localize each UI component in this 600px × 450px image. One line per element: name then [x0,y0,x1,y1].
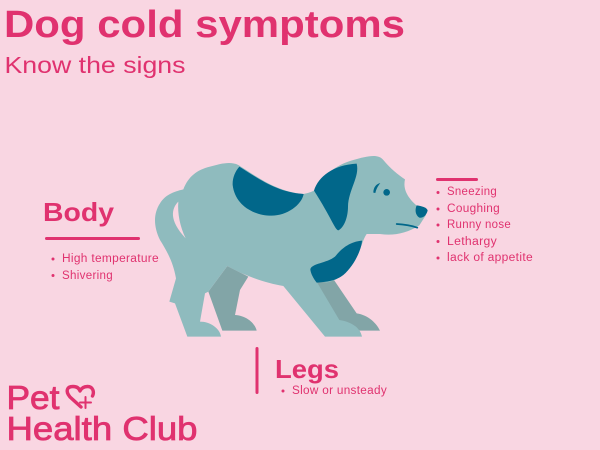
illustration: dog [155,156,428,337]
back patch [233,167,304,216]
chest patch [310,241,362,283]
head symptom list: Coughing [447,203,500,215]
panel: legs symptoms [256,347,387,397]
body symptom list: Shivering [62,270,113,282]
logo: Pet Health Club [6,379,198,447]
icon: heart with plus [67,386,93,408]
body symptom list: High temperature [62,253,159,265]
far front leg [315,280,380,331]
head symptom list: Runny nose [447,219,511,231]
eye [383,189,390,196]
subtitle: Know the signs [4,52,186,78]
body symptom list [52,253,159,282]
head symptom list: Sneezing [447,186,497,198]
head symptom list: Lethargy [447,236,497,248]
mouth [397,224,417,228]
panel: head symptoms [436,178,533,264]
logo: Pet Health Club: Pet [6,379,60,416]
eyebrow [373,183,380,193]
legs symptom item: Slow or unsteady [292,385,387,397]
heading: legs: Legs [275,354,339,384]
title: Dog cold symptoms [4,4,405,46]
tail gap [173,202,186,238]
logo: Pet Health Club: Health Club [6,410,198,447]
head symptom list: lack of appetite [447,252,533,264]
nose [416,205,428,218]
ear [314,164,357,230]
panel: body symptoms [43,197,159,282]
head symptom list [436,186,533,264]
heading: body: Body [43,197,115,227]
far hind leg [208,266,257,331]
dog body [155,156,426,337]
